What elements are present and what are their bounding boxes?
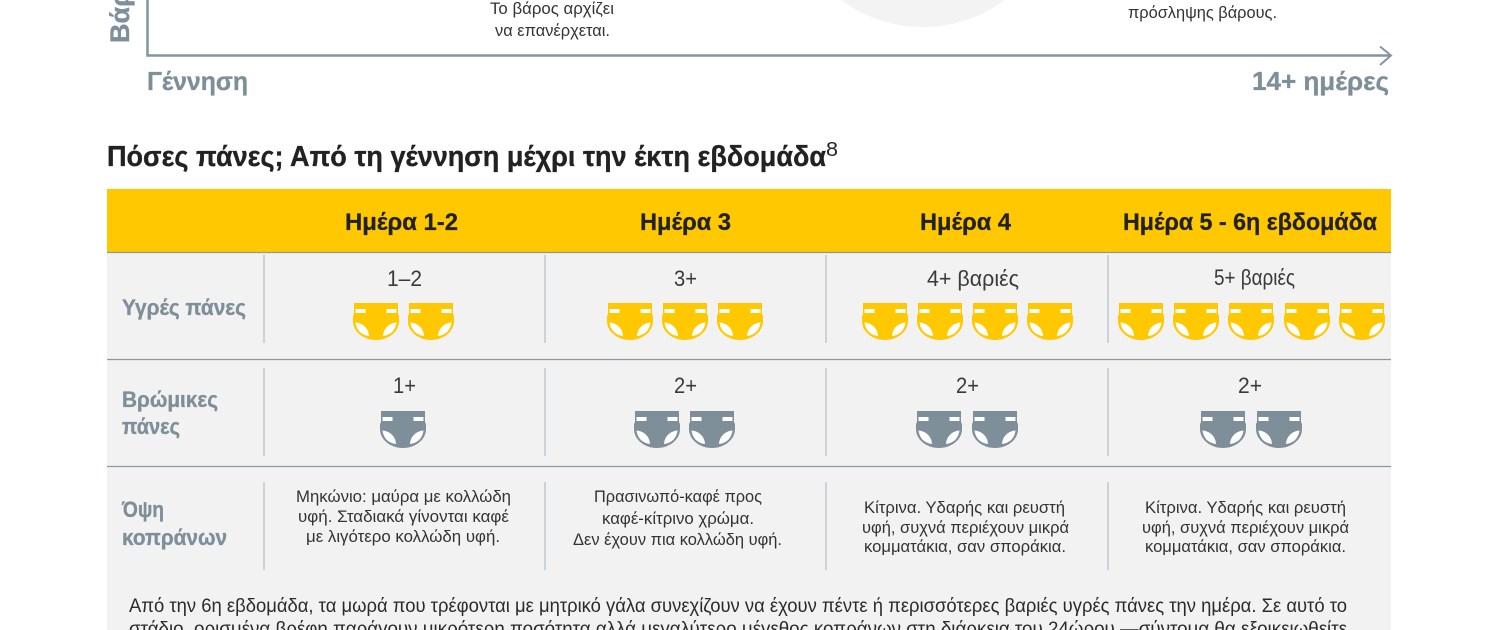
stool text: day 3: Πρασινωπό-καφέ προς: [594, 487, 762, 506]
row: dirty diapers: 2+: [674, 373, 697, 398]
stool text: day 1-2: υφή. Σταδιακά γίνονται καφέ: [298, 507, 509, 526]
row: wet diapers: 4+ βαριές: [927, 266, 1019, 291]
footnote paragraph: [129, 596, 1348, 630]
row: dirty diapers: 2+: [1238, 373, 1262, 398]
table header: Ημέρα 5 - 6η εβδομάδα: [1123, 209, 1377, 236]
row: stool appearance: κοπράνων: [122, 525, 227, 550]
arrow head: [1380, 46, 1391, 65]
stool text: day 1-2: [296, 487, 511, 546]
stool text: day 4: Κίτρινα. Υδαρής και ρευστή: [864, 498, 1065, 517]
stool text: day 4: [862, 498, 1069, 556]
grey circle: [785, 0, 1061, 27]
chart note: weight returns: να επανέρχεται.: [495, 21, 610, 40]
table panel: [107, 189, 1391, 630]
stool text: day 5 to week 6: κομματάκια, σαν σποράκια.: [1145, 537, 1346, 556]
stool text: day 5 to week 6: Κίτρινα. Υδαρής και ρευστή: [1145, 498, 1346, 517]
row: dirty diapers: 1+: [393, 373, 416, 398]
table header: Ημέρα 1-2: [345, 209, 458, 236]
row: stool appearance: Όψη: [121, 497, 164, 522]
axes with arrow: [148, 0, 1390, 56]
row: wet diapers: Υγρές πάνες: [122, 295, 246, 320]
stool text: day 3: καφέ-κίτρινο χρώμα.: [602, 509, 754, 528]
x axis end label: 14+ ημέρες: [1252, 66, 1389, 96]
icons: grey diapers: [380, 411, 1302, 448]
row: dirty diapers: πάνες: [122, 414, 180, 439]
stool text: day 3: [573, 487, 782, 549]
footnote paragraph: Από την 6η εβδομάδα, τα μωρά που τρέφονται με μητρικό γάλα συνεχίζουν να έχουν πέντε ή περισσότερες βαριές υγρές πάνες την ημέρα. Σε αυτό το: [129, 596, 1347, 617]
chart note: weight returns: [490, 0, 614, 40]
row: wet diapers: 5+ βαριές: [1214, 265, 1295, 290]
table header: Ημέρα 4: [920, 209, 1012, 236]
row: dirty diapers: [122, 373, 1302, 448]
row: dirty diapers: Βρώμικες: [122, 387, 218, 412]
table background: [107, 252, 1391, 630]
stool text: day 4: υφή, συχνά περιέχουν μικρά: [862, 518, 1069, 537]
row: dirty diapers: 2+: [956, 373, 979, 398]
section heading: Πόσες πάνες; Από τη γέννηση μέχρι την έκτη εβδομάδα: [107, 141, 826, 173]
stool text: day 5 to week 6: [1142, 498, 1349, 556]
row: wet diapers: 1–2: [387, 266, 422, 291]
table header: Ημέρα 3: [640, 209, 731, 236]
row: wet diapers: [122, 265, 1385, 340]
row: wet diapers: 3+: [674, 266, 697, 291]
row: stool appearance: [121, 487, 1349, 556]
icons: yellow diapers: [353, 303, 1385, 340]
table header: [107, 189, 1391, 252]
stool text: day 3: Δεν έχουν πια κολλώδη υφή.: [573, 530, 782, 549]
weight chart fragment: [105, 0, 1391, 96]
section heading: 8: [826, 139, 838, 161]
stool text: day 1-2: με λιγότερο κολλώδη υφή.: [306, 527, 500, 546]
x axis start label: Γέννηση: [147, 66, 248, 96]
chart note: weight gain: πρόσληψης βάρους.: [1128, 3, 1277, 22]
stool text: day 1-2: Μηκώνιο: μαύρα με κολλώδη: [296, 487, 511, 506]
stool text: day 5 to week 6: υφή, συχνά περιέχουν μικρά: [1142, 518, 1349, 537]
stool text: day 4: κομματάκια, σαν σποράκια.: [864, 537, 1066, 556]
